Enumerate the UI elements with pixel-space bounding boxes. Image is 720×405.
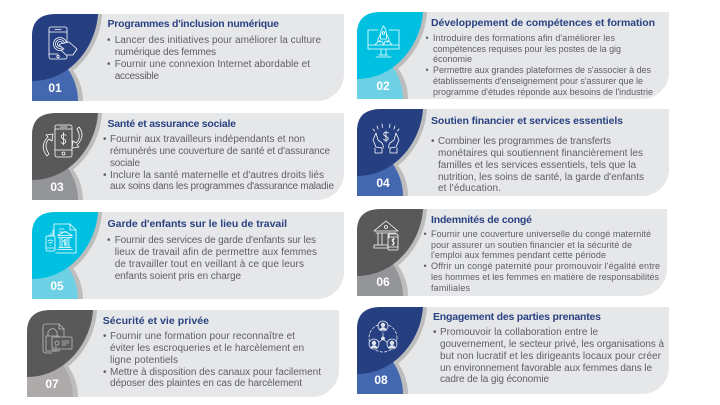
bullet list: aux soins dans les programmes d'assurance maladie (110, 181, 334, 192)
bullet list: Introduire des formations afin d'améliorer les (433, 33, 616, 43)
title: Indemnités de congé (431, 214, 532, 226)
bullet list: • (433, 327, 437, 338)
bullet list: numérique des femmes (115, 47, 216, 58)
bullet list: • (426, 33, 429, 43)
number 06: 06 (376, 275, 390, 289)
bullet list: • (107, 35, 111, 46)
bullet list (426, 33, 653, 97)
number 07: 07 (45, 377, 59, 391)
card 07: Sécurité et vie privée (27, 310, 339, 397)
bullet list: accessible (115, 71, 159, 82)
number 04: 04 (376, 176, 390, 190)
bullet list: les hommes et les femmes en matière de responsabilités (431, 272, 660, 282)
card 06: Indemnités de congé (357, 209, 667, 296)
number 02: 02 (376, 79, 390, 93)
badge 03 (32, 113, 344, 200)
bullet list: nutrition, les soins de santé, la garde d'enfants (438, 172, 644, 183)
bullet list: • (424, 261, 427, 271)
bullet list: • (424, 229, 427, 239)
number 05: 05 (50, 279, 64, 293)
number 08: 08 (374, 373, 388, 387)
bullet list: Fournir une formation pour reconnaître et (110, 331, 295, 342)
bullet list: but non lucratif et les dirigeants locaux pour créer (440, 351, 662, 362)
card 02: Développement de compétences et formation (357, 12, 669, 99)
badge 02 (357, 12, 669, 99)
bullet list: éviter les escroqueries et le harcèlement en (110, 343, 304, 354)
bullet list (103, 134, 334, 192)
bullet list (107, 235, 317, 282)
number 01: 01 (48, 81, 62, 95)
bullet list: Fournir des services de garde d'enfants sur les (115, 235, 316, 246)
bullet list: Offrir un congé paternité pour promouvoir l'égalité entre (431, 261, 660, 271)
bullet list: monétaires qui soutiennent financièrement les (438, 148, 643, 159)
bullet list: Fournir aux travailleurs indépendants et non (110, 134, 305, 145)
bullet list: • (426, 65, 429, 75)
bullet list (424, 229, 660, 293)
bullet list: programme d'études réponde aux besoins de l'industrie (433, 87, 653, 97)
bullet list: • (103, 170, 107, 181)
card 05: Garde d'enfants sur le lieu de travail (32, 212, 344, 299)
card 08: Engagement des parties prenantes (357, 307, 669, 394)
bullet list: ligne potentiels (110, 355, 178, 366)
bullet list: et l'éducation. (438, 183, 501, 194)
icon: phone with dollar and arrows (43, 125, 82, 157)
bullet list (433, 327, 664, 385)
bullet list: sociale (110, 158, 140, 169)
bullet list: de travailler tout en veillant à ce que leurs (115, 259, 304, 270)
bullet list: • (431, 136, 435, 147)
title: Programmes d'inclusion numérique (108, 18, 279, 30)
title: Santé et assurance sociale (108, 118, 236, 130)
bullet list: enfants soient pris en charge (115, 271, 241, 282)
icon: rocket on monitor (368, 26, 399, 57)
icon: hands holding dollar (373, 124, 399, 153)
bullet list: déposer des plaintes en cas de harcèlement (110, 378, 302, 389)
bullet list: établissements d'enseignement pour s'assurer que le (433, 76, 643, 86)
bullet list: • (103, 367, 107, 378)
bullet list: pour assurer un soutien financier et la sécurité de (431, 240, 632, 250)
bullet list: gouvernement, le secteur privé, les organisations à (440, 339, 664, 350)
bullet list: un environnement favorable aux femmes dans le (440, 363, 652, 374)
badge 04 (357, 109, 669, 196)
bullet list: • (107, 235, 111, 246)
bullet list (107, 35, 321, 82)
card 04: Soutien financier et services essentiels (357, 109, 669, 196)
bullet list: Inclure la santé maternelle et d'autres droits liés (110, 170, 324, 181)
icon: padlock and bank card (43, 324, 72, 353)
bullet list: cadre de la gig économie (440, 374, 549, 385)
bullet list: Fournir une couverture universelle du congé maternité (431, 229, 651, 239)
bullet list: Mettre à disposition des canaux pour facilement (110, 367, 321, 378)
bullet list: économie (433, 54, 472, 64)
icon: connected people (369, 321, 397, 352)
bullet list: Permettre aux grandes plateformes de s'associer à des (433, 65, 652, 75)
badge 05 (32, 212, 344, 299)
bullet list: familiales (431, 283, 470, 293)
badge 06 (357, 209, 667, 296)
bullet list (103, 331, 321, 389)
title: Garde d'enfants sur le lieu de travail (108, 218, 287, 230)
bullet list: Promouvoir la collaboration entre le (440, 327, 598, 338)
bullet list: lieux de travail afin de permettre aux femmes (115, 247, 317, 258)
badge 01 (32, 14, 344, 101)
bullet list: • (103, 134, 107, 145)
bullet list: • (103, 331, 107, 342)
card 03: Santé et assurance sociale (32, 113, 344, 200)
icon: document with bank and phone (46, 224, 76, 253)
icon: phone touch (49, 27, 77, 59)
bullet list: rémunérés une couverture de santé et d'assurance (110, 146, 330, 157)
icon: bank and mobile (374, 221, 398, 250)
title: Développement de compétences et formation (431, 17, 655, 29)
badge 08 (357, 307, 669, 394)
bullet list: Combiner les programmes de transferts (438, 136, 611, 147)
bullet list: Fournir une connexion Internet abordable et (115, 59, 310, 70)
bullet list: l'emploi aux femmes pendant cette période (431, 250, 606, 260)
title: Soutien financier et services essentiels (431, 115, 623, 127)
card 01: Programmes d'inclusion numérique (32, 14, 344, 101)
bullet list: • (107, 59, 111, 70)
bullet list: familles et les services essentiels, tels que la (438, 160, 636, 171)
bullet list: Lancer des initiatives pour améliorer la culture (115, 35, 321, 46)
title: Engagement des parties prenantes (433, 311, 601, 323)
bullet list (431, 136, 644, 194)
number 03: 03 (50, 180, 64, 194)
bullet list: compétences requises pour les postes de la gig (433, 44, 621, 54)
badge 07 (27, 310, 339, 397)
title: Sécurité et vie privée (103, 315, 209, 327)
